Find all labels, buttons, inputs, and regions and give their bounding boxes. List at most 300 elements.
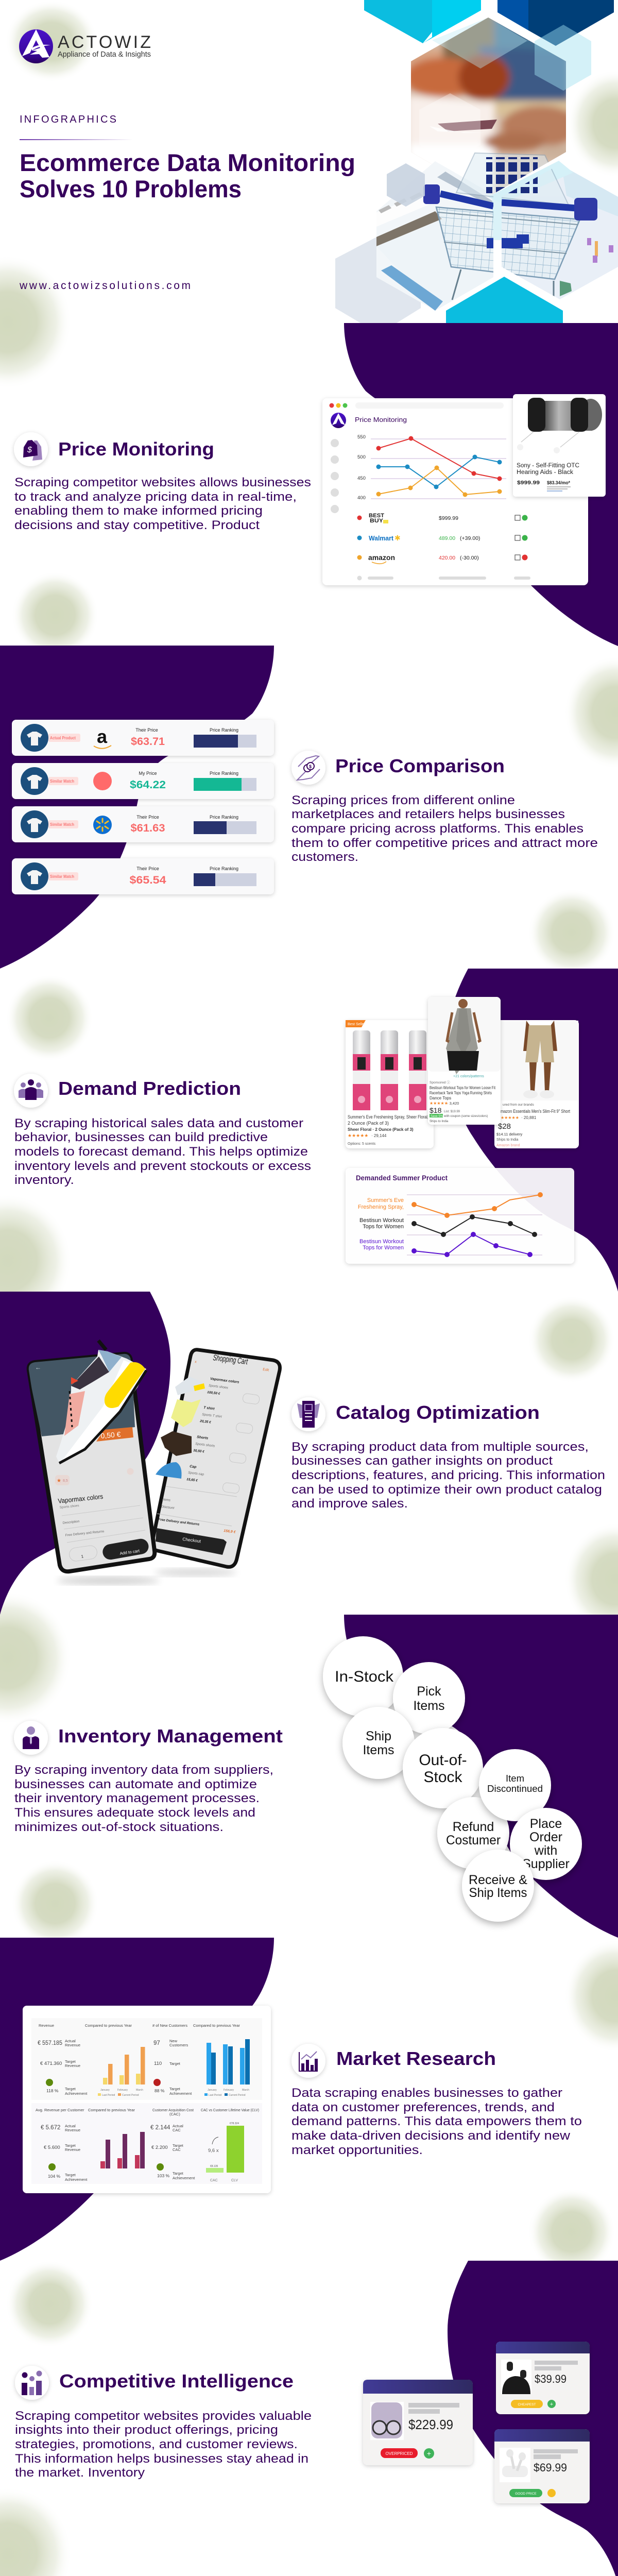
heading: Competitive Intelligence xyxy=(59,2370,294,2392)
price card: overpriced xyxy=(363,2380,473,2465)
phone mockup: shopping cart: T shirt xyxy=(203,1406,215,1411)
phone mockup: product page: Description xyxy=(62,1520,80,1525)
product popup: hearing aids: $999.99 xyxy=(517,480,540,486)
panel shape: catalog optimization purple blob xyxy=(0,1292,170,1615)
text block: enabling them to make informed pricing xyxy=(14,504,263,518)
phone mockup: product page xyxy=(26,1341,160,1585)
phone mockup: shopping cart: Checkout xyxy=(182,1536,201,1544)
phone mockup: shopping cart: Shorts xyxy=(197,1435,209,1440)
panel: revenue: Current Period xyxy=(229,2094,246,2097)
phone mockup: shopping cart: x xyxy=(195,1360,197,1364)
bubble: out of stock: Out-of- xyxy=(419,1752,467,1769)
bubble: out of stock: Stock xyxy=(423,1769,463,1786)
comparison card 2: Price Ranking xyxy=(210,771,238,776)
phone mockup: product page: Add to cart xyxy=(119,1549,140,1556)
phone mockup: shopping cart: Cap xyxy=(190,1465,197,1469)
retailer rows: 489.00 xyxy=(439,535,455,541)
text block xyxy=(14,476,311,532)
phone mockup: shopping cart: Sports shoes xyxy=(209,1384,229,1390)
panel: average revenue and CAC: (CAC) xyxy=(169,2112,180,2116)
heading: Catalog Optimization xyxy=(336,1402,540,1423)
image: running shoe xyxy=(56,1341,146,1463)
product card: spray: Summer's Eve Freshening Spray, Sheer Floral, xyxy=(348,1114,428,1120)
panel: revenue: Actual xyxy=(65,2039,76,2043)
product card: shorts: $28 xyxy=(498,1122,511,1131)
comparison card 2: Similar Match xyxy=(50,778,74,784)
bubble: pick items: Items xyxy=(413,1699,445,1713)
panel: revenue: Compared to previous Year xyxy=(85,2023,132,2028)
panel: average revenue and CAC: € 2.200 xyxy=(151,2145,168,2150)
text block xyxy=(14,1763,273,1834)
panel: average revenue and CAC: 104 % xyxy=(48,2174,61,2179)
comparison card 3: $61.63 xyxy=(131,822,165,834)
comparison card 1: Price Ranking xyxy=(210,727,238,733)
phone mockup: product page: ★ xyxy=(57,1478,61,1484)
product card: shorts: $14.11 delivery xyxy=(496,1132,523,1137)
bubble: pick items xyxy=(393,1662,465,1734)
panel shape: market research purple blob xyxy=(0,1938,274,2261)
price card: cheapest: $39.99 xyxy=(535,2372,566,2385)
chart card: demanded summer product: Tops for Women xyxy=(363,1224,404,1230)
panel shape: competitive intelligence purple blob xyxy=(448,2261,618,2576)
phone mockup: shopping cart: Vapormax colors xyxy=(210,1377,239,1384)
price card: good price: $69.99 xyxy=(534,2461,567,2474)
chart title: Price Monitoring xyxy=(355,416,407,423)
section: demand prediction xyxy=(14,1074,311,1187)
panel: average revenue and CAC: CLV xyxy=(231,2179,238,2182)
bubble: ship items: Ship xyxy=(366,1729,391,1743)
phone mockup: product page: ← xyxy=(35,1364,41,1371)
panel: revenue: Revenue xyxy=(39,2023,54,2028)
icon: shopping cart xyxy=(423,153,597,300)
panel shape: demand prediction purple blob xyxy=(448,969,618,1292)
panel: revenue xyxy=(38,2023,250,2097)
product card: shorts: mazon Essentials Men's Slim-Fit 9" Short xyxy=(501,1109,570,1114)
bubble: place order xyxy=(510,1808,582,1880)
heading: Inventory Management xyxy=(58,1725,283,1747)
panel: average revenue and CAC: €8.135 xyxy=(210,2165,218,2168)
bubble: place order: Place xyxy=(530,1817,562,1831)
panel: revenue: 110 xyxy=(154,2061,162,2066)
text block xyxy=(14,1116,311,1187)
chart card: demanded summer product: Summer's Eve xyxy=(367,1197,404,1204)
text block: compare pricing across platforms. This enables xyxy=(291,822,583,836)
product popup: hearing aids: Hearing Aids - Black xyxy=(517,469,573,476)
comparison card 3 xyxy=(12,806,274,842)
text block: and improve sales. xyxy=(291,1497,408,1511)
price card: good price xyxy=(494,2429,590,2503)
diagram: inventory bubbles xyxy=(323,1636,582,1922)
text block: behavior, businesses can build predictive xyxy=(14,1130,268,1144)
text block: their inventory management processes. xyxy=(14,1791,260,1805)
chart card: demanded summer product: Freshening Spray, xyxy=(358,1204,404,1210)
phone mockup: product page: 1 xyxy=(81,1554,84,1559)
icon: businessman xyxy=(14,1721,48,1755)
bubble: refund customer: Refund xyxy=(453,1820,494,1834)
image: tank top xyxy=(446,999,480,1074)
dashboard card: market research xyxy=(23,2006,271,2193)
comparison card 4: $65.54 xyxy=(130,874,166,886)
phone mockup: product page: 0,50 € xyxy=(100,1430,121,1440)
image: items xyxy=(156,1377,205,1479)
panel: revenue: € 557.185 xyxy=(38,2040,62,2046)
panel: average revenue and CAC: CAC vs Customer Lifetime Value (CLV) xyxy=(201,2108,259,2112)
product card: tank top: Ships to India xyxy=(430,1120,449,1123)
phone mockup: shopping cart: Sports shorts xyxy=(195,1442,215,1448)
product card: tank top: Bestisun Workout Tops for Women Loose Fit xyxy=(430,1086,496,1090)
line chart xyxy=(357,434,506,501)
product card: tank top: $18 xyxy=(430,1106,442,1114)
text block: insights into their product offerings, pricing xyxy=(15,2423,278,2437)
product card: tank top: Racerback Tank Tops Yoga Running Shirts xyxy=(430,1091,492,1095)
logo: Actowiz header: Appliance of Data & Insights xyxy=(58,50,151,59)
section: price comparison xyxy=(291,751,598,864)
text block: This ensures adequate stock levels and xyxy=(14,1806,255,1820)
text block: Data scraping enables businesses to gather xyxy=(291,2086,562,2100)
comparison card 2 xyxy=(12,763,274,799)
bubble: pick items: Pick xyxy=(417,1684,441,1699)
bubble: place order: Order xyxy=(529,1830,562,1844)
panel: revenue: Achievement xyxy=(65,2091,88,2096)
product card: tank top: ★★★★★ xyxy=(430,1101,448,1106)
panel: average revenue and CAC: 103 % xyxy=(157,2173,170,2178)
price card: cheapest: + xyxy=(550,2401,553,2408)
phone mockup: shopping cart: Edit xyxy=(263,1368,269,1372)
phone mockup: shopping cart: 20,35 € xyxy=(199,1419,212,1425)
text block xyxy=(291,793,598,864)
text block: make data-driven decisions and identify new xyxy=(291,2129,570,2143)
panel: average revenue and CAC: Achievement xyxy=(173,2176,195,2180)
text block: By scraping historical sales data and customer xyxy=(14,1116,303,1130)
icon: people group xyxy=(14,1074,48,1108)
panel: average revenue and CAC: Customer Acquisition Cost xyxy=(152,2108,194,2112)
logo: Actowiz header: ACTOWIZ xyxy=(58,32,151,52)
panel: revenue: Revenue xyxy=(65,2063,80,2068)
text block: By scraping inventory data from suppliers, xyxy=(14,1763,273,1777)
product card: spray: · 29,144 xyxy=(371,1133,387,1138)
chart card: demanded summer product: Demanded Summer Product xyxy=(356,1174,448,1182)
text block: can be used to optimize their own product catalog xyxy=(291,1483,602,1497)
product card: shorts: ured from our brands xyxy=(503,1103,534,1107)
phone mockup: shopping cart: Items xyxy=(162,1498,171,1502)
bubble: item discontinued: Discontinued xyxy=(487,1783,543,1794)
panel: average revenue and CAC xyxy=(36,2108,259,2182)
retailer rows xyxy=(357,513,530,580)
panel: revenue: January xyxy=(100,2089,110,2092)
heading: Price Comparison xyxy=(335,755,505,776)
label: infographics: INFOGRAPHICS xyxy=(20,114,116,125)
product popup: hearing aids xyxy=(513,394,606,497)
product card: spray: Options: 5 scents xyxy=(348,1142,376,1146)
price card: overpriced: $229.99 xyxy=(408,2417,453,2432)
bubble: ship items: Items xyxy=(363,1743,394,1757)
icon: hands with coins: $ xyxy=(309,764,312,769)
product card: tank top: Sponsored ⓘ xyxy=(430,1080,450,1084)
retailer rows: BEST xyxy=(369,513,384,519)
phone mockup: product page: Sports shoes xyxy=(59,1504,80,1510)
bubble: in-stock: In-Stock xyxy=(335,1668,394,1685)
retailer rows: $999.99 xyxy=(439,515,458,521)
line chart: 450 xyxy=(357,476,366,481)
heading: Demand Prediction xyxy=(58,1078,241,1099)
bubble: item discontinued xyxy=(479,1749,551,1821)
phone mockup: shopping cart: Sports T shirt xyxy=(202,1413,222,1419)
chart card: demanded summer product: Tops for Women xyxy=(363,1245,404,1251)
text block: to track and analyze pricing data in real-time, xyxy=(14,490,297,504)
panel: revenue: Target xyxy=(169,2087,181,2091)
phone mockup: shopping cart: Free Delivery and Returns xyxy=(158,1518,200,1527)
panel: revenue: March xyxy=(136,2089,143,2092)
product card: tank top: with coupon (some sizes/colors) xyxy=(443,1115,488,1118)
text block: inventory levels and prevent stockouts or excess xyxy=(14,1159,311,1173)
panel: average revenue and CAC: Target xyxy=(173,2143,184,2148)
retailer rows: amazon xyxy=(368,553,395,562)
product card: tank top: Dance Tops xyxy=(430,1096,451,1100)
hex photo backgrounds: laptop and report xyxy=(376,161,495,311)
product card: tank top: Save 5% xyxy=(431,1115,443,1118)
text block: By scraping product data from multiple sources, xyxy=(291,1440,589,1454)
comparison card 4: Their Price xyxy=(136,866,159,871)
bubble: in-stock xyxy=(323,1636,403,1717)
comparison card 4: Similar Match xyxy=(50,874,74,879)
retailer rows: ✱ xyxy=(394,534,401,542)
panel: average revenue and CAC: Achievement xyxy=(65,2177,88,2182)
panel: revenue: 118 % xyxy=(46,2088,59,2093)
hex photo: hands with phone xyxy=(411,18,566,194)
panel: average revenue and CAC: Revenue xyxy=(65,2147,80,2152)
icon: price tags xyxy=(14,432,48,466)
icon: catalog xyxy=(291,1397,325,1431)
bubble: refund customer: Costumer xyxy=(446,1833,501,1848)
chart card: demanded summer product: Bestisun Workout xyxy=(359,1217,404,1224)
panel: average revenue and CAC: Compared to previous Year xyxy=(88,2108,135,2112)
panel: average revenue and CAC: CAC xyxy=(173,2147,181,2152)
title: Ecommerce Data Monitoring xyxy=(20,149,355,176)
phone mockup: product page: 8,5 xyxy=(63,1479,68,1483)
panel: average revenue and CAC: Target xyxy=(173,2171,184,2176)
price card: cheapest xyxy=(496,2342,590,2414)
line chart: 400 xyxy=(357,495,366,501)
icon: bars with coins xyxy=(15,2366,49,2400)
product card: spray xyxy=(346,1020,434,1148)
price card: cheapest: CHEAPEST xyxy=(518,2403,536,2406)
phone mockup: shopping cart: Sports cap xyxy=(188,1471,204,1477)
product card: shorts: · 20,881 xyxy=(521,1115,537,1120)
icon: hands with coins xyxy=(291,751,325,785)
bubble: receive and ship: Receive & xyxy=(469,1873,527,1887)
divider line under label xyxy=(20,139,133,140)
hero: hexagon photo collage xyxy=(335,0,618,323)
section: competitive intelligence xyxy=(15,2366,312,2480)
text block: models to forecast demand. This helps optimize xyxy=(14,1145,308,1159)
comparison card 2: My Price xyxy=(139,771,157,776)
panel: average revenue and CAC: 9,6 x xyxy=(208,2148,219,2154)
panel: revenue: Target xyxy=(65,2059,76,2064)
text block: inventory. xyxy=(14,1173,74,1187)
bubble: receive and ship xyxy=(462,1850,534,1922)
panel: revenue: # of New Customers xyxy=(152,2023,187,2028)
panel: average revenue and CAC: € 5.600 xyxy=(44,2145,60,2150)
heading: Price Monitoring xyxy=(58,438,214,460)
text block: strategies, promotions, and customer reviews. xyxy=(15,2437,298,2451)
panel shape: price comparison purple blob xyxy=(0,646,274,969)
section: market research xyxy=(291,2044,582,2157)
comparison card 2: $64.22 xyxy=(130,779,166,791)
panel: revenue: February xyxy=(224,2089,234,2092)
product popup: hearing aids: $83.34/mo* xyxy=(547,480,570,485)
price card: overpriced: + xyxy=(427,2449,431,2458)
image: spray cans xyxy=(353,1030,426,1110)
text block: Scraping prices from different online xyxy=(291,793,515,807)
phone mockup: shopping cart: Discount xyxy=(161,1505,175,1510)
image: khaki shorts xyxy=(523,1021,557,1098)
text block: demand patterns. This data empowers them to xyxy=(291,2114,582,2128)
text block: the market. Inventory xyxy=(15,2466,145,2480)
panel: revenue: Target xyxy=(65,2087,76,2091)
comparison card 1: a xyxy=(97,726,108,747)
section: price monitoring xyxy=(14,432,311,532)
panel shape: inventory management purple blob xyxy=(344,1615,618,1938)
retailer rows: (-30.00) xyxy=(460,555,479,561)
panel: revenue: Revenue xyxy=(65,2043,80,2047)
text block: businesses can automate and optimize xyxy=(14,1777,257,1791)
panel: revenue: 88 % xyxy=(154,2088,165,2093)
logo: Actowiz header xyxy=(19,29,151,63)
panel: revenue: 97 xyxy=(153,2040,160,2046)
panel: average revenue and CAC: € 5.672 xyxy=(41,2125,60,2131)
price card: good price: GOOD PRICE xyxy=(515,2492,537,2496)
panel: revenue: February xyxy=(117,2089,128,2092)
panel: revenue: € 471.360 xyxy=(40,2061,62,2066)
panel: average revenue and CAC: Avg. Revenue per Customer xyxy=(36,2108,84,2112)
phone mockup: shopping cart: 30,50 € xyxy=(193,1449,205,1454)
heading: Market Research xyxy=(336,2048,496,2069)
panel: average revenue and CAC: CAC xyxy=(210,2179,218,2182)
product card: shorts: Amazon brand xyxy=(496,1144,520,1147)
panel shape: price monitoring purple blob xyxy=(344,323,618,646)
panel: revenue: Last Period xyxy=(102,2094,115,2097)
product popup: hearing aids: Sony - Self-Fitting OTC xyxy=(517,463,579,469)
text block xyxy=(291,2086,582,2157)
line chart: 500 xyxy=(357,454,366,460)
product card: spray: ★★★★★ xyxy=(348,1133,368,1138)
phone mockup: shopping cart xyxy=(152,1350,280,1577)
text block: decisions and stay competitive. Product xyxy=(14,518,260,532)
product card: shorts: Ships to India xyxy=(496,1138,519,1142)
phone mockup: product page: Free Delivery and Returns xyxy=(65,1530,105,1537)
website url: www.actowizsolutions.com xyxy=(19,280,191,292)
image: black earbuds xyxy=(501,2360,531,2394)
text block xyxy=(291,1440,605,1511)
bubble: ship items xyxy=(342,1707,415,1779)
panel: revenue: Last Period xyxy=(209,2094,222,2097)
panel: revenue: Customers xyxy=(169,2043,188,2047)
chart card: demanded summer product xyxy=(346,1168,574,1264)
panel: revenue: March xyxy=(242,2089,249,2092)
chart card: demanded summer product: Bestisun Workout xyxy=(359,1239,404,1245)
text block: minimizes out-of-stock situations. xyxy=(14,1820,224,1834)
image: hearing aids xyxy=(517,398,602,453)
retailer rows: (+39.00) xyxy=(460,535,480,541)
title xyxy=(20,149,355,202)
panel: average revenue and CAC: Target xyxy=(65,2173,76,2177)
panel: revenue: Compared to previous Year xyxy=(193,2023,240,2028)
comparison card 1: Their Price xyxy=(135,727,158,733)
product card: spray: 2 Ounce (Pack of 3) xyxy=(348,1121,389,1126)
text block: descriptions, features, and pricing. This information xyxy=(291,1468,605,1482)
retailer rows: 420.00 xyxy=(439,555,455,561)
text block: This information helps businesses stay ahead in xyxy=(15,2452,308,2466)
panel: average revenue and CAC: Actual xyxy=(65,2124,76,2128)
bubble: place order: with xyxy=(534,1843,557,1858)
panel: average revenue and CAC: Revenue xyxy=(65,2128,80,2132)
dashboard card: price monitoring chart xyxy=(322,398,588,585)
comparison card 4 xyxy=(12,858,274,894)
text block: businesses can gather insights on product xyxy=(291,1454,553,1468)
phone mockup: shopping cart: Shopping Cart xyxy=(213,1353,248,1366)
product card: spray: Best Seller xyxy=(348,1023,366,1026)
product card: tank top: · 3,420 xyxy=(447,1101,459,1106)
text block: Scraping competitor websites allows businesses xyxy=(14,476,311,489)
price card: overpriced: OVERPRICED xyxy=(386,2451,413,2456)
section: inventory management xyxy=(14,1721,283,1834)
text block: them to offer competitive prices and attract more xyxy=(291,836,598,850)
panel: revenue: Current Period xyxy=(122,2094,139,2097)
product card: spray: Sheer Floral · 2 Ounce (Pack of 3) xyxy=(348,1127,414,1132)
comparison card 1: $63.71 xyxy=(131,736,165,748)
panel: revenue: Achievement xyxy=(169,2091,192,2096)
comparison card 4: Price Ranking xyxy=(210,866,238,871)
retailer rows: Walmart xyxy=(369,534,394,542)
text block: data on customer preferences, trends, and xyxy=(291,2100,555,2114)
phone mockup: shopping cart: 100,50 € xyxy=(207,1391,220,1396)
panel: average revenue and CAC: Target xyxy=(65,2143,76,2148)
text block: Scraping competitor websites provides valuable xyxy=(15,2409,312,2423)
panel: revenue: Target xyxy=(169,2061,181,2066)
phone mockup: product page: Vapormax colors xyxy=(58,1493,104,1505)
bubble: out of stock xyxy=(403,1728,483,1808)
text block: market opportunities. xyxy=(291,2143,423,2157)
product card: shorts xyxy=(494,1020,579,1148)
line chart: 550 xyxy=(357,434,366,440)
section: catalog optimization xyxy=(291,1397,605,1511)
panel: average revenue and CAC: Actual xyxy=(173,2124,183,2128)
product card: shorts: ★★★★★ xyxy=(501,1115,519,1120)
bubble: receive and ship: Ship Items xyxy=(469,1886,527,1900)
text block xyxy=(15,2409,312,2480)
bubble: refund customer xyxy=(437,1797,509,1869)
product card: tank top xyxy=(428,997,501,1125)
text block: customers. xyxy=(291,850,358,864)
product card: tank top: List: $19.99 xyxy=(444,1110,460,1113)
text block: marketplaces and retailers helps businesses xyxy=(291,807,565,821)
comparison card 3: Similar Match xyxy=(50,822,74,827)
phone mockup: shopping cart: 156,9 € xyxy=(224,1529,236,1534)
phone mockup: shopping cart: 15,65 € xyxy=(186,1478,198,1483)
panel: revenue: New xyxy=(169,2039,178,2043)
bubble: item discontinued: Item xyxy=(506,1773,524,1784)
logo mark xyxy=(331,413,346,428)
panel: average revenue and CAC: €78.324 xyxy=(230,2122,239,2125)
comparison card 1: Actual Product xyxy=(50,735,76,740)
icon: bar chart with trend xyxy=(291,2044,325,2078)
panel: average revenue and CAC: € 2.144 xyxy=(150,2125,170,2131)
product card: tank top: +21 colors/patterns xyxy=(453,1075,484,1078)
comparison card 3: Price Ranking xyxy=(210,815,238,820)
bubble: place order: Supplier xyxy=(522,1857,570,1871)
icon: price tags: $ xyxy=(27,446,32,454)
image: white earbuds xyxy=(500,2448,530,2482)
